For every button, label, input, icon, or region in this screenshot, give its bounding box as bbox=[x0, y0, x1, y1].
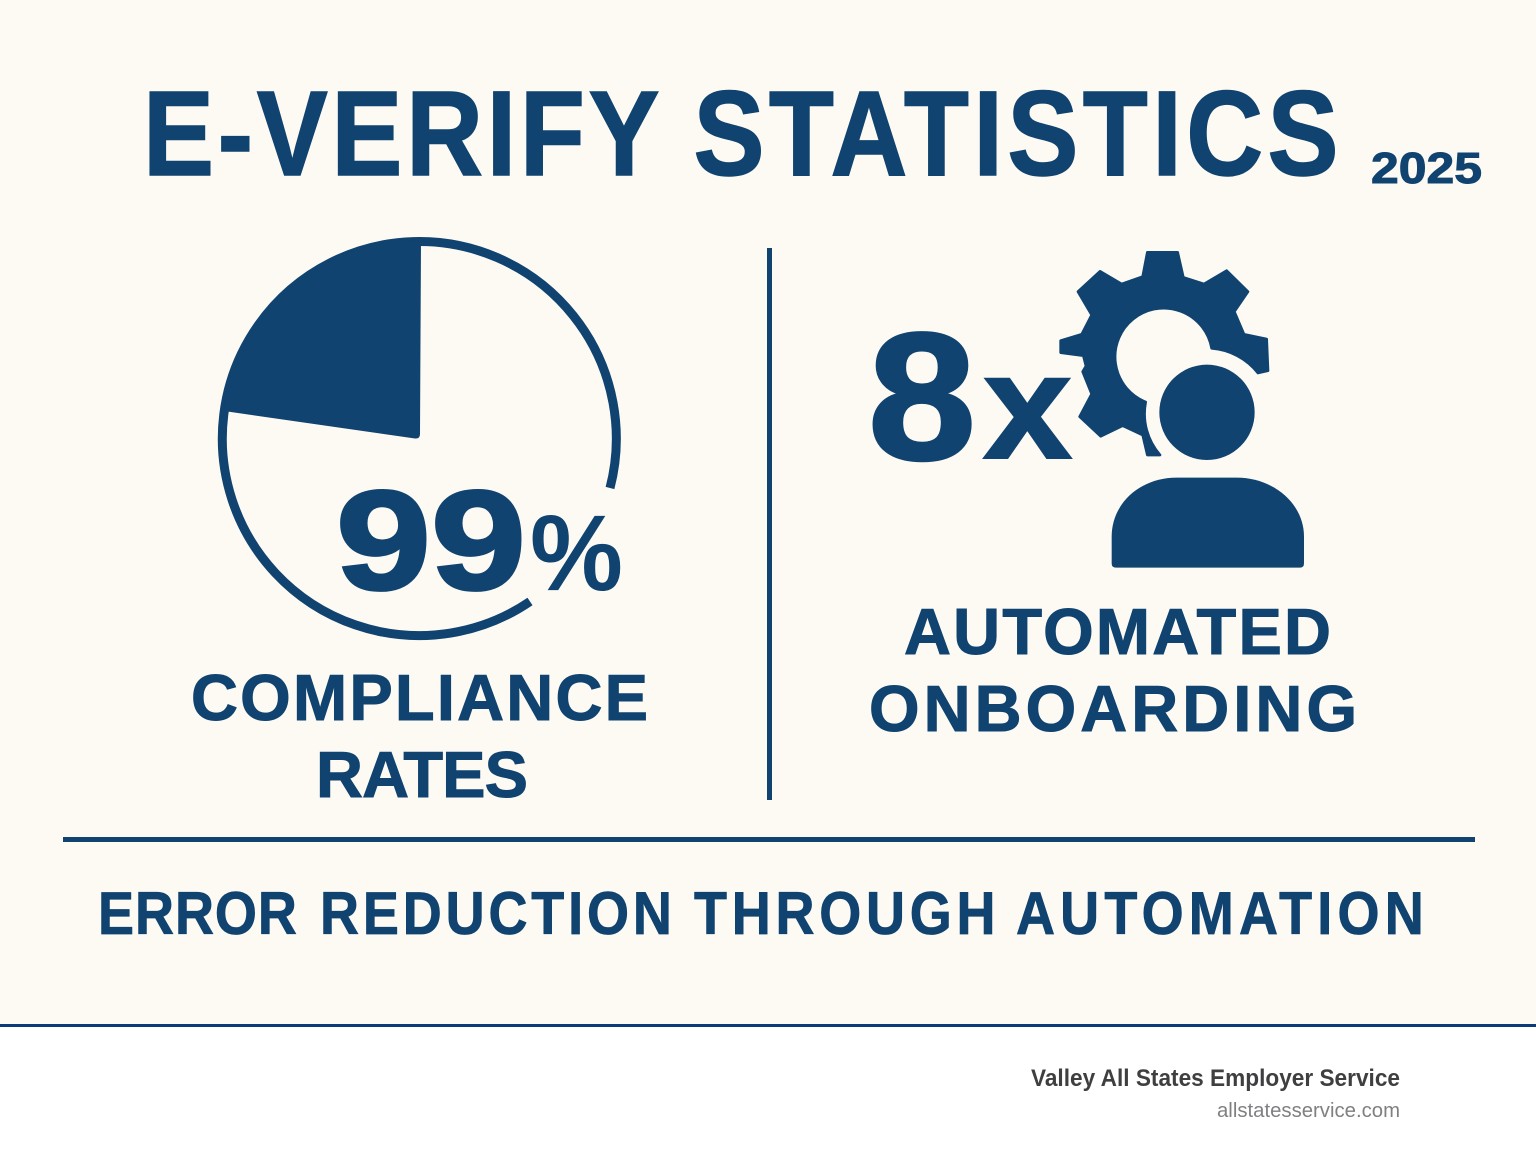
title: STATISTICS bbox=[694, 67, 1339, 202]
label: compliance rates: COMPLIANCE bbox=[191, 661, 648, 734]
label: automated onboarding bbox=[869, 595, 1357, 745]
pie chart ring bbox=[222, 242, 616, 636]
statistic: 8x: 8 bbox=[868, 296, 976, 498]
year label: 2025 bbox=[1371, 144, 1482, 193]
vertical divider bbox=[767, 248, 772, 800]
title bbox=[143, 67, 1339, 202]
subheading: THROUGH bbox=[694, 880, 996, 948]
subheading bbox=[98, 880, 1424, 948]
label: compliance rates: RATES bbox=[316, 738, 528, 811]
footer band bbox=[0, 1024, 1536, 1122]
panel: compliance rates bbox=[191, 240, 648, 811]
panel: automated onboarding bbox=[868, 252, 1357, 745]
statistic: 8x: x bbox=[983, 322, 1072, 490]
label: compliance rates bbox=[191, 661, 648, 811]
subheading: REDUCTION bbox=[320, 880, 672, 948]
statistic: 99 percent: % bbox=[530, 492, 623, 613]
gear bbox=[1061, 252, 1268, 455]
footer company name: Valley All States Employer Service bbox=[1031, 1065, 1400, 1092]
statistic: 8x bbox=[868, 296, 1072, 498]
label: automated onboarding: ONBOARDING bbox=[869, 672, 1357, 745]
title: E-VERIFY bbox=[143, 67, 660, 202]
subheading: AUTOMATION bbox=[1016, 880, 1424, 948]
person body bbox=[1112, 478, 1304, 568]
icon: gear and person bbox=[1061, 252, 1304, 568]
pie chart wedge bbox=[224, 240, 421, 439]
footer rule bbox=[0, 1024, 1536, 1027]
statistic: 99 percent bbox=[336, 461, 623, 619]
label: automated onboarding: AUTOMATED bbox=[904, 595, 1331, 668]
person head bbox=[1159, 365, 1255, 460]
statistic: 99 percent: 99 bbox=[336, 461, 526, 619]
footer website: allstatesservice.com bbox=[1217, 1100, 1400, 1122]
horizontal divider bbox=[63, 837, 1475, 842]
subheading: ERROR bbox=[98, 880, 297, 948]
